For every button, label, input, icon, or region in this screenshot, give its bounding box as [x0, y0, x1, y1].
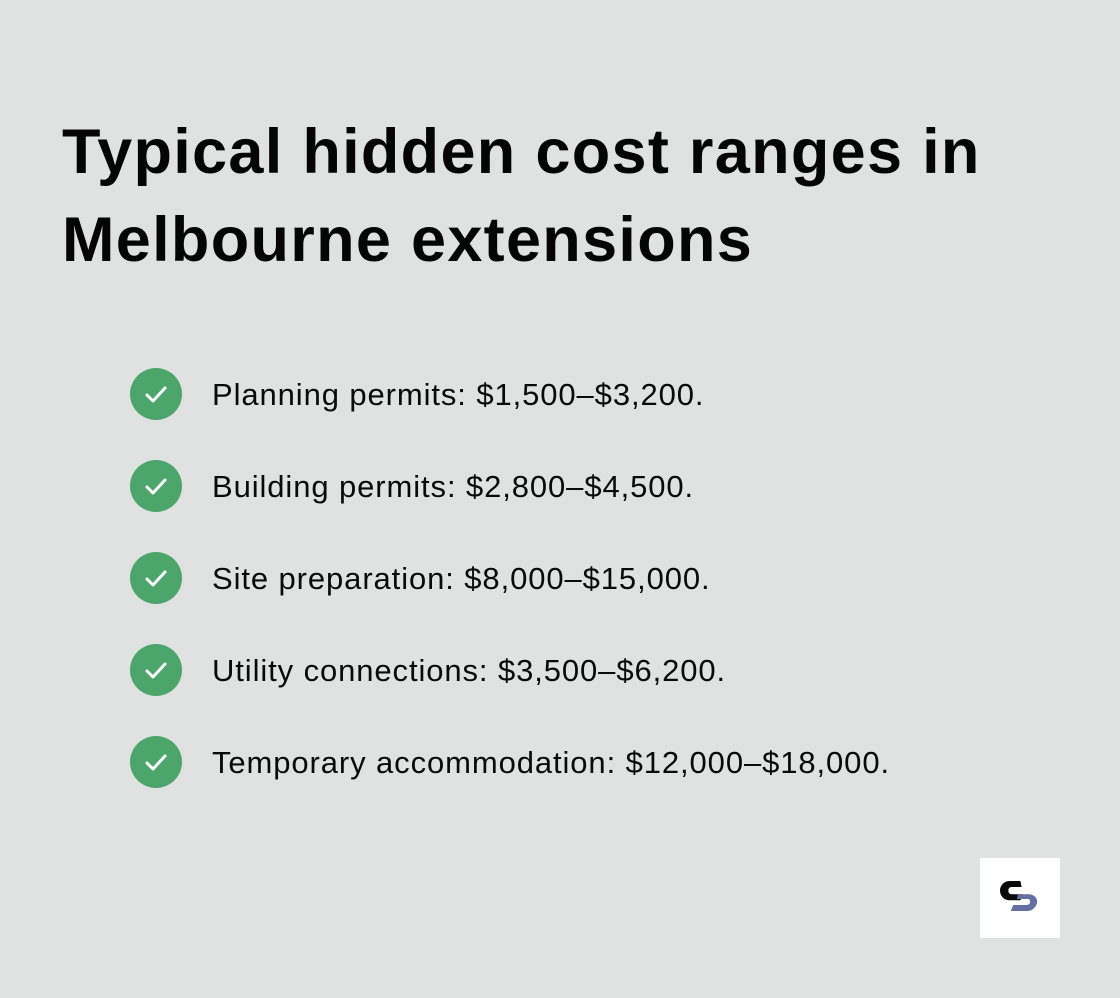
- item: planning permits: [130, 368, 704, 420]
- logo: [980, 858, 1060, 938]
- item: temporary accommodation: Temporary accommodation: $12,000–$18,000.: [212, 745, 890, 780]
- item: utility connections: Utility connections: $3,500–$6,200.: [212, 653, 726, 688]
- item: building permits: [130, 460, 694, 512]
- item: temporary accommodation: [130, 736, 890, 788]
- item: building permits: Building permits: $2,800–$4,500.: [212, 469, 694, 504]
- item: site preparation: [130, 552, 711, 604]
- item: planning permits: Planning permits: $1,500–$3,200.: [212, 377, 704, 412]
- item: site preparation: Site preparation: $8,000–$15,000.: [212, 561, 711, 596]
- item: utility connections: [130, 644, 726, 696]
- title: Melbourne extensions: [62, 205, 753, 275]
- title: Typical hidden cost ranges in: [62, 117, 981, 187]
- title: [62, 117, 981, 275]
